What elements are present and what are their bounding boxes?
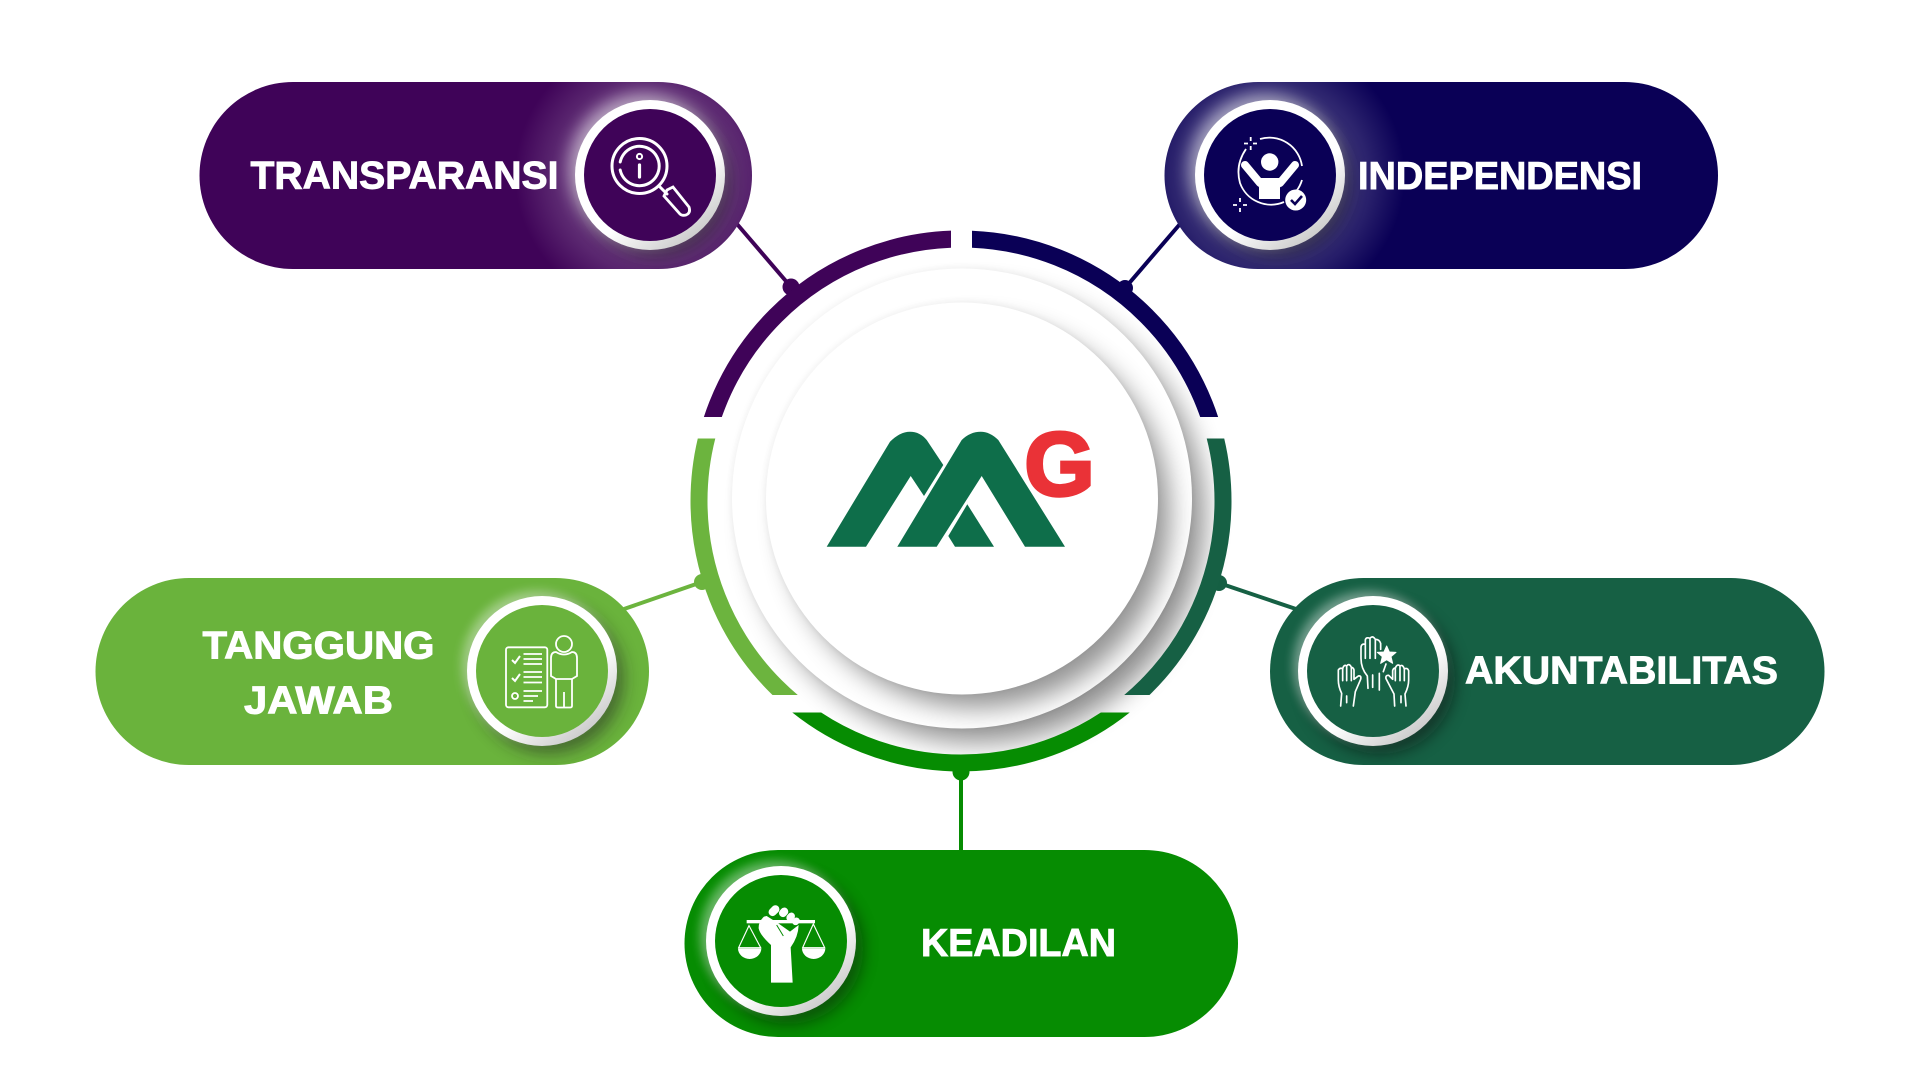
connector: akuntabilitas [1211,575,1296,609]
center hub [699,239,1223,763]
segmented ring [699,239,1223,763]
panel: transparansi [200,82,752,269]
heading: KEADILAN [921,922,1116,965]
connector: transparansi [737,224,800,296]
panel: independensi [1164,82,1718,269]
heading: TANGGUNG [202,624,434,668]
heading: JAWAB [244,680,393,722]
heading: AKUNTABILITAS [1465,650,1778,692]
heading: INDEPENDENSI [1358,155,1642,198]
logo [827,415,1095,547]
panel: tanggung jawab [96,578,649,765]
connector: independensi [1117,224,1180,296]
heading [202,624,434,722]
panel: akuntabilitas [1270,578,1824,765]
icon: raised hands and star [1298,596,1448,746]
icon: raised person [1195,100,1345,250]
icon: magnifier [575,100,725,250]
heading: TRANSPARANSI [250,154,558,198]
inner white disc [766,302,1158,694]
outer white disc [732,268,1192,728]
logo: G [1024,415,1095,515]
connector: tanggung jawab [624,574,710,609]
connector: keadilan [952,764,970,851]
inner disc shadow [764,300,1170,708]
icon: fist holding scales [706,866,856,1016]
panel: keadilan [684,850,1238,1037]
outer disc shadow [730,266,1205,743]
icon: checklist and person [467,596,617,746]
